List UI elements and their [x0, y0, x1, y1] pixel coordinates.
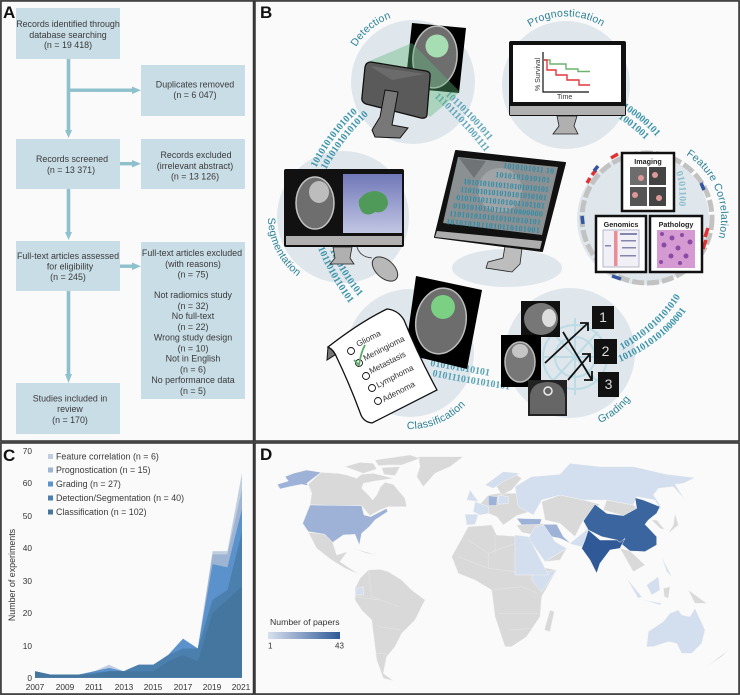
box: full-text excluded: (with reasons)	[165, 259, 221, 269]
box: full-text assessed: for eligibility	[47, 262, 94, 272]
box: full-text excluded: (n = 32)	[178, 301, 208, 311]
screen binary text: 1010101011 10	[503, 161, 554, 176]
binary data streams: 0101110101010101	[432, 370, 510, 390]
checklist paper: Glioma	[354, 328, 383, 349]
box: full-text excluded: (n = 22)	[178, 322, 208, 332]
panel label A: A	[3, 3, 15, 22]
binary data streams: 1011010110101	[318, 247, 354, 304]
label: Detection: Detection	[350, 13, 390, 46]
box: records screened: Records screened	[36, 154, 108, 164]
x axis labels: 2007	[26, 682, 45, 692]
background circles	[277, 20, 709, 418]
box: records screened: (n = 13 371)	[47, 165, 95, 175]
box: full-text excluded: (n = 5)	[180, 386, 206, 396]
label: Prognostication: Prognostication	[527, 8, 604, 27]
checklist paper: Adenoma	[380, 379, 417, 404]
box: full-text excluded	[141, 242, 245, 399]
legend: Grading (n = 27)	[56, 479, 121, 489]
box: full-text excluded: Full-text articles excluded	[142, 248, 242, 258]
legend: Feature correlation (n = 6)	[56, 452, 159, 462]
legend: Detection/Segmentation (n = 40)	[56, 493, 184, 503]
panel label C: C	[3, 446, 15, 465]
checklist paper: Metastasis	[367, 349, 407, 376]
box: records identified: database searching	[29, 30, 107, 40]
arrows	[545, 323, 592, 380]
binary data streams: 10101010101010	[322, 111, 368, 169]
checklist paper	[327, 309, 437, 423]
box: full-text excluded: (n = 75)	[178, 270, 208, 280]
illustration: detection monitor and scan	[362, 23, 466, 138]
box: full-text excluded: (n = 10)	[178, 344, 208, 354]
North America	[277, 455, 463, 575]
y axis labels: 10	[23, 641, 32, 651]
illustration: prognostication monitor with survival chart	[509, 41, 626, 134]
flow arrows	[65, 58, 141, 383]
box: records excluded: Records excluded	[160, 150, 232, 160]
choropleth world map	[277, 455, 728, 681]
box: full-text excluded: No full-text	[172, 311, 215, 321]
grade 1: 1	[599, 309, 607, 325]
panel: world map of papers	[255, 443, 739, 694]
y axis labels: 60	[23, 478, 32, 488]
x axis labels: 2017	[174, 682, 193, 692]
legend	[48, 452, 184, 517]
binary data streams: 100000101	[626, 104, 660, 136]
box: full-text assessed	[16, 241, 120, 291]
x axis labels: 2015	[144, 682, 163, 692]
map legend: 1	[268, 642, 273, 650]
screen binary text: 1010101010101	[495, 170, 550, 185]
box: records excluded	[141, 139, 245, 189]
panel: applications of radiomics illustration	[254, 0, 740, 442]
illustration: feature correlation composite	[582, 153, 712, 283]
y axis labels: 70	[23, 446, 32, 456]
map legend: 43	[335, 642, 344, 650]
box: duplicates removed: Duplicates removed	[156, 80, 234, 90]
panel: PRISMA flow diagram	[1, 1, 254, 441]
box: studies included	[16, 383, 120, 434]
icon: WHO emblem	[543, 318, 607, 395]
screen binary text: 0101010110111110000000	[453, 201, 543, 219]
panel label B: B	[260, 3, 272, 22]
southern hemisphere and Africa	[355, 525, 728, 681]
survival chart: Time	[557, 94, 572, 101]
screen binary text: 1101010101010101010101	[460, 185, 547, 202]
y axis labels: 50	[23, 511, 32, 521]
x axis labels: 2011	[85, 682, 103, 692]
y axis labels: 20	[23, 608, 32, 618]
binary data streams	[311, 92, 686, 390]
checklist paper: Meningioma	[361, 333, 407, 363]
x axis labels: 2009	[56, 682, 75, 692]
binary data streams: 1010101010101010	[620, 294, 680, 350]
box: records identified: Records identified through	[16, 19, 120, 29]
binary data streams: 0101100	[676, 171, 686, 206]
box: pathology: Pathology	[659, 220, 693, 229]
y axis title: Number of experiments	[7, 528, 17, 621]
legend: Prognostication (n = 15)	[56, 465, 151, 475]
survival chart	[535, 52, 590, 101]
box: full-text excluded: Not radiomics study	[154, 290, 233, 300]
screen binary text: 0101010110101001101101	[456, 193, 545, 211]
box: genomics: Genomics	[604, 220, 638, 229]
box: full-text assessed: Full-text articles assessed	[17, 251, 119, 261]
Eurasia	[465, 463, 695, 575]
box: records excluded: (n = 13 126)	[171, 172, 219, 182]
x axis labels: 2021	[232, 682, 251, 692]
screen binary text: 1010101011010110101001	[446, 217, 540, 235]
label: Grading: Grading	[598, 396, 631, 422]
box: records identified: (n = 19 418)	[44, 40, 92, 50]
binary data streams: 010101010101	[430, 360, 489, 376]
label: Classification: Classification	[407, 402, 465, 430]
binary data streams: 10101010101010	[311, 108, 356, 168]
screen binary text: 1101010101010101010101	[449, 209, 541, 227]
screen binary text: 1010101010110101010101	[463, 177, 549, 194]
box: studies included: Studies included in	[33, 394, 107, 404]
box: full-text excluded: No performance data	[151, 375, 235, 385]
illustration: classification scan and checklist	[327, 276, 482, 423]
stacked area chart	[35, 473, 242, 678]
y axis labels	[23, 446, 32, 683]
checklist options	[348, 348, 382, 404]
screen binary text	[446, 161, 554, 235]
label: Segmentation: Segmentation	[268, 218, 300, 276]
map legend: Number of papers	[270, 617, 340, 627]
binary data streams: 1110111011001111	[434, 94, 490, 152]
label: Feature Correlation: Feature Correlation	[686, 149, 729, 238]
box: duplicates removed: (n = 6 047)	[173, 90, 217, 100]
box: records excluded: (irrelevant abstract)	[157, 161, 233, 171]
panel: experiments per year chart	[1, 443, 254, 694]
checklist paper: Lymphoma	[374, 362, 416, 390]
x axis labels: 2013	[115, 682, 134, 692]
binary data streams: 10101010101	[330, 250, 363, 296]
box: imaging: Imaging	[634, 157, 662, 166]
binary data streams: 1001001	[618, 116, 648, 140]
grade 2: 2	[602, 343, 610, 359]
box: records identified	[16, 8, 120, 59]
binary data streams: 1011011001011	[446, 92, 492, 140]
y axis labels: 30	[23, 576, 32, 586]
x axis labels: 2019	[203, 682, 222, 692]
grade 3: 3	[605, 376, 613, 392]
icon: mouse	[368, 252, 402, 286]
box: studies included: review	[57, 404, 83, 414]
box: full-text excluded: (n = 6)	[180, 364, 206, 374]
box: full-text excluded: Wrong study design	[154, 332, 232, 342]
box: duplicates removed	[141, 65, 245, 116]
box: records screened	[16, 139, 120, 189]
x axis labels	[26, 682, 251, 692]
box: studies included: (n = 170)	[52, 415, 88, 425]
illustration: segmentation monitor	[284, 169, 404, 286]
illustration: grading scans, arrows and grades	[501, 301, 619, 416]
illustration: central monitor with binary code	[435, 151, 565, 272]
box: full-text excluded: Not in English	[166, 354, 220, 364]
y axis labels: 0	[27, 673, 32, 683]
panel label D: D	[260, 445, 272, 464]
legend: Classification (n = 102)	[56, 507, 147, 517]
map legend	[268, 617, 344, 650]
y axis labels: 40	[23, 543, 32, 553]
box: full-text assessed: (n = 245)	[50, 272, 86, 282]
binary data streams: 10101010101000001	[618, 308, 686, 362]
survival chart: % Survival	[535, 57, 542, 91]
